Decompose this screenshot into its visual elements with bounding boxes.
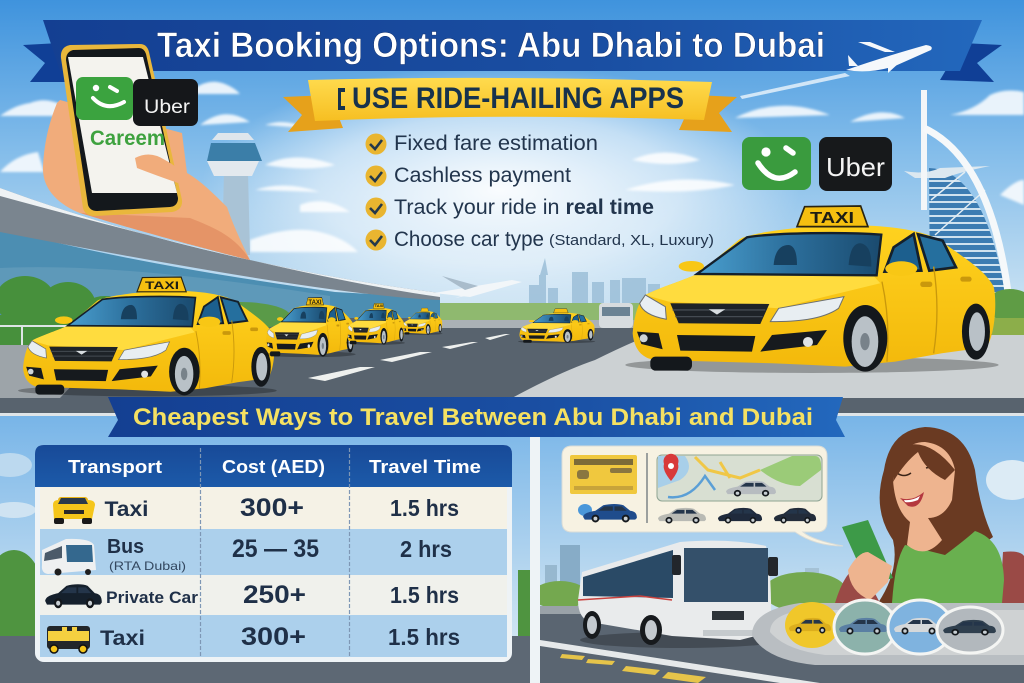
airport terminal xyxy=(0,188,440,318)
row: taxi: 1.5 hrs xyxy=(390,495,459,521)
row: taxi: Taxi xyxy=(104,498,148,521)
row: private car: 1.5 hrs xyxy=(390,582,459,608)
benefit checklist xyxy=(366,132,714,251)
airport control tower xyxy=(207,133,262,255)
row: taxi shuttle: Taxi xyxy=(100,627,145,650)
shirt xyxy=(892,531,1004,603)
skyline xyxy=(529,258,660,303)
uber logo large: Uber xyxy=(826,152,885,182)
row: taxi shuttle xyxy=(47,623,460,653)
uber app logo on phone xyxy=(133,79,198,126)
item 2: Cashless payment xyxy=(394,164,571,187)
car choices xyxy=(578,504,816,524)
row: private car: Private Car xyxy=(106,588,198,607)
subtitle ribbon: USE RIDE-HAILING APPS xyxy=(352,82,684,115)
table header xyxy=(35,445,512,487)
comparison table xyxy=(35,445,512,662)
Burj Al Arab xyxy=(904,90,1009,300)
distant taxi xyxy=(518,309,595,343)
large taxi right: TAXI xyxy=(810,210,854,227)
trees by terminal xyxy=(0,276,290,345)
icon: taxi front xyxy=(53,497,95,524)
queued taxi 3: TAXI xyxy=(375,303,383,308)
map preview xyxy=(657,454,822,501)
ribbon left tail xyxy=(283,95,343,132)
row: bus xyxy=(42,535,452,576)
ribbon right tail xyxy=(679,95,737,132)
item 1: Fixed fare estimation xyxy=(394,132,598,155)
strip above bottom panels xyxy=(0,413,1024,416)
roadside shrub right xyxy=(986,289,1024,335)
option: white car xyxy=(888,600,952,654)
check icon 3 xyxy=(366,198,386,218)
careem app logo on phone xyxy=(76,77,133,120)
bottom left scene xyxy=(0,416,531,683)
queued taxi 2: TAXI xyxy=(308,300,322,306)
woman using phone xyxy=(835,427,1024,603)
option: blue car xyxy=(834,600,896,654)
section banner xyxy=(108,397,845,437)
main title banner xyxy=(23,20,1002,82)
banner left tail xyxy=(23,43,75,82)
careem label: Careem xyxy=(90,127,165,150)
top scene background: sky xyxy=(0,0,1024,330)
check icon 1 xyxy=(366,134,386,154)
hair xyxy=(878,427,993,603)
clouds xyxy=(0,82,1024,252)
row: taxi xyxy=(53,494,459,524)
row: bus: Bus xyxy=(107,536,144,558)
row: bus: (RTA Dubai) xyxy=(109,559,186,573)
icon: bus xyxy=(42,539,96,576)
queued taxi 3 xyxy=(346,303,405,345)
icon: yellow shuttle xyxy=(47,626,90,653)
large taxi right xyxy=(625,206,999,373)
banner right tail xyxy=(940,43,1002,82)
contrail xyxy=(740,73,850,99)
chair xyxy=(835,552,1024,603)
airplane taking off xyxy=(434,276,522,298)
item 4 xyxy=(394,228,714,251)
check icon 4 xyxy=(366,230,386,250)
check icon 2 xyxy=(366,166,386,186)
row: bus: 25 — 35 xyxy=(232,535,319,563)
large taxi front left: TAXI xyxy=(145,280,179,292)
item 4: Choose car type xyxy=(394,228,544,251)
vertical divider between panels xyxy=(530,437,540,683)
table header: Cost (AED) xyxy=(222,457,325,477)
face and neck xyxy=(893,442,955,551)
car selection platform xyxy=(752,600,1024,665)
item 3: Track your ride in real time xyxy=(394,196,654,219)
lane markings xyxy=(308,334,510,381)
bottom right scene xyxy=(532,416,1024,683)
section banner: Cheapest Ways to Travel Between Abu Dhabi and Dubai xyxy=(133,404,813,431)
row: taxi shuttle: 1.5 hrs xyxy=(388,624,460,650)
uber app logo on phone: Uber xyxy=(144,97,191,118)
left pavement xyxy=(0,345,110,398)
ground road xyxy=(0,318,1024,414)
uber logo large xyxy=(819,137,892,191)
row: taxi shuttle: 300+ xyxy=(241,623,306,651)
row: bus: 2 hrs xyxy=(400,536,452,562)
item 4: (Standard, XL, Luxury) xyxy=(549,232,714,249)
distant green strip xyxy=(430,303,1024,321)
row: private car: 250+ xyxy=(243,581,306,609)
table header: Transport xyxy=(68,457,162,477)
option: dark car xyxy=(937,607,1003,653)
railing xyxy=(0,326,70,345)
table header: Travel Time xyxy=(369,457,481,477)
queued taxi 4 xyxy=(402,308,443,335)
coach bus xyxy=(578,541,780,648)
queued taxi 2 xyxy=(264,298,356,357)
row: private car xyxy=(45,581,459,609)
airplane on banner xyxy=(846,42,932,73)
phone in hand xyxy=(842,520,893,600)
large taxi front left xyxy=(18,277,277,396)
payment card xyxy=(570,455,637,494)
subtitle ribbon xyxy=(283,78,737,132)
option: yellow car xyxy=(785,602,839,648)
far concrete band xyxy=(430,320,1024,329)
careem logo large xyxy=(742,137,811,190)
hand holding phone xyxy=(43,44,250,260)
icon: black car xyxy=(45,584,102,608)
main title banner: Taxi Booking Options: Abu Dhabi to Dubai xyxy=(157,26,825,65)
smartphone xyxy=(61,44,198,216)
white shuttle in distance xyxy=(599,303,633,328)
row: taxi: 300+ xyxy=(240,494,304,522)
right concrete plaza xyxy=(512,335,1024,398)
speech bubble with booking options xyxy=(562,446,843,546)
table rows background xyxy=(40,487,507,657)
